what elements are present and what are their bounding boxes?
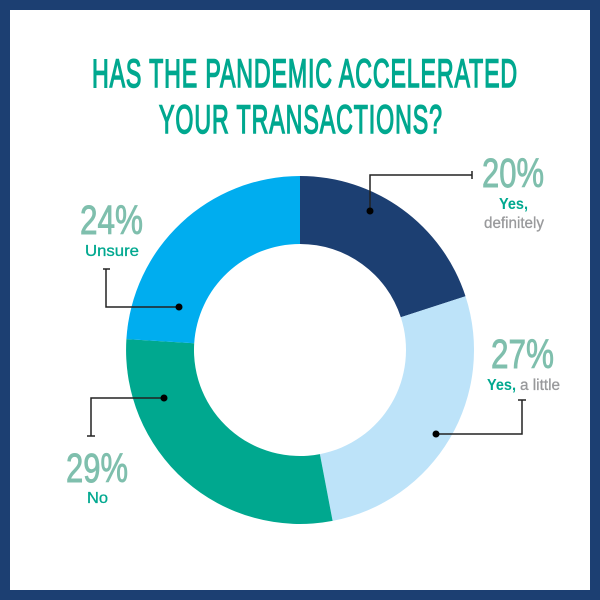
leader line: [370, 171, 472, 211]
value: 20%: [482, 150, 544, 196]
value: 24%: [80, 197, 143, 243]
callout: 29% No: [66, 394, 168, 507]
value: 29%: [66, 445, 128, 491]
leader line: [103, 269, 179, 307]
title: HAS THE PANDEMIC ACCELERATED: [92, 50, 517, 96]
leader line: [436, 400, 526, 434]
label: No: [87, 490, 108, 507]
callout: 27% Yes, a little: a little: [520, 377, 560, 394]
label: Unsure: [85, 243, 139, 260]
label: Yes,: [487, 377, 516, 394]
label: Yes,: [499, 196, 528, 213]
value: 27%: [491, 331, 554, 377]
segment: No 29%: [126, 339, 333, 524]
segment: Yes, definitely 20%: [300, 176, 466, 317]
donut chart: [126, 176, 474, 524]
segment: Unsure 24%: [126, 176, 300, 343]
callout: 20% Yes, definitely: [366, 150, 544, 232]
callout: 24% Unsure: [80, 197, 182, 310]
title: YOUR TRANSACTIONS?: [159, 96, 442, 142]
segment: Yes, a little 27%: [320, 296, 474, 521]
title: [92, 50, 517, 142]
leader line: [87, 398, 164, 436]
callout: 27% Yes, a little: [432, 331, 560, 438]
callout: 20% Yes, definitely: definitely: [484, 215, 544, 232]
